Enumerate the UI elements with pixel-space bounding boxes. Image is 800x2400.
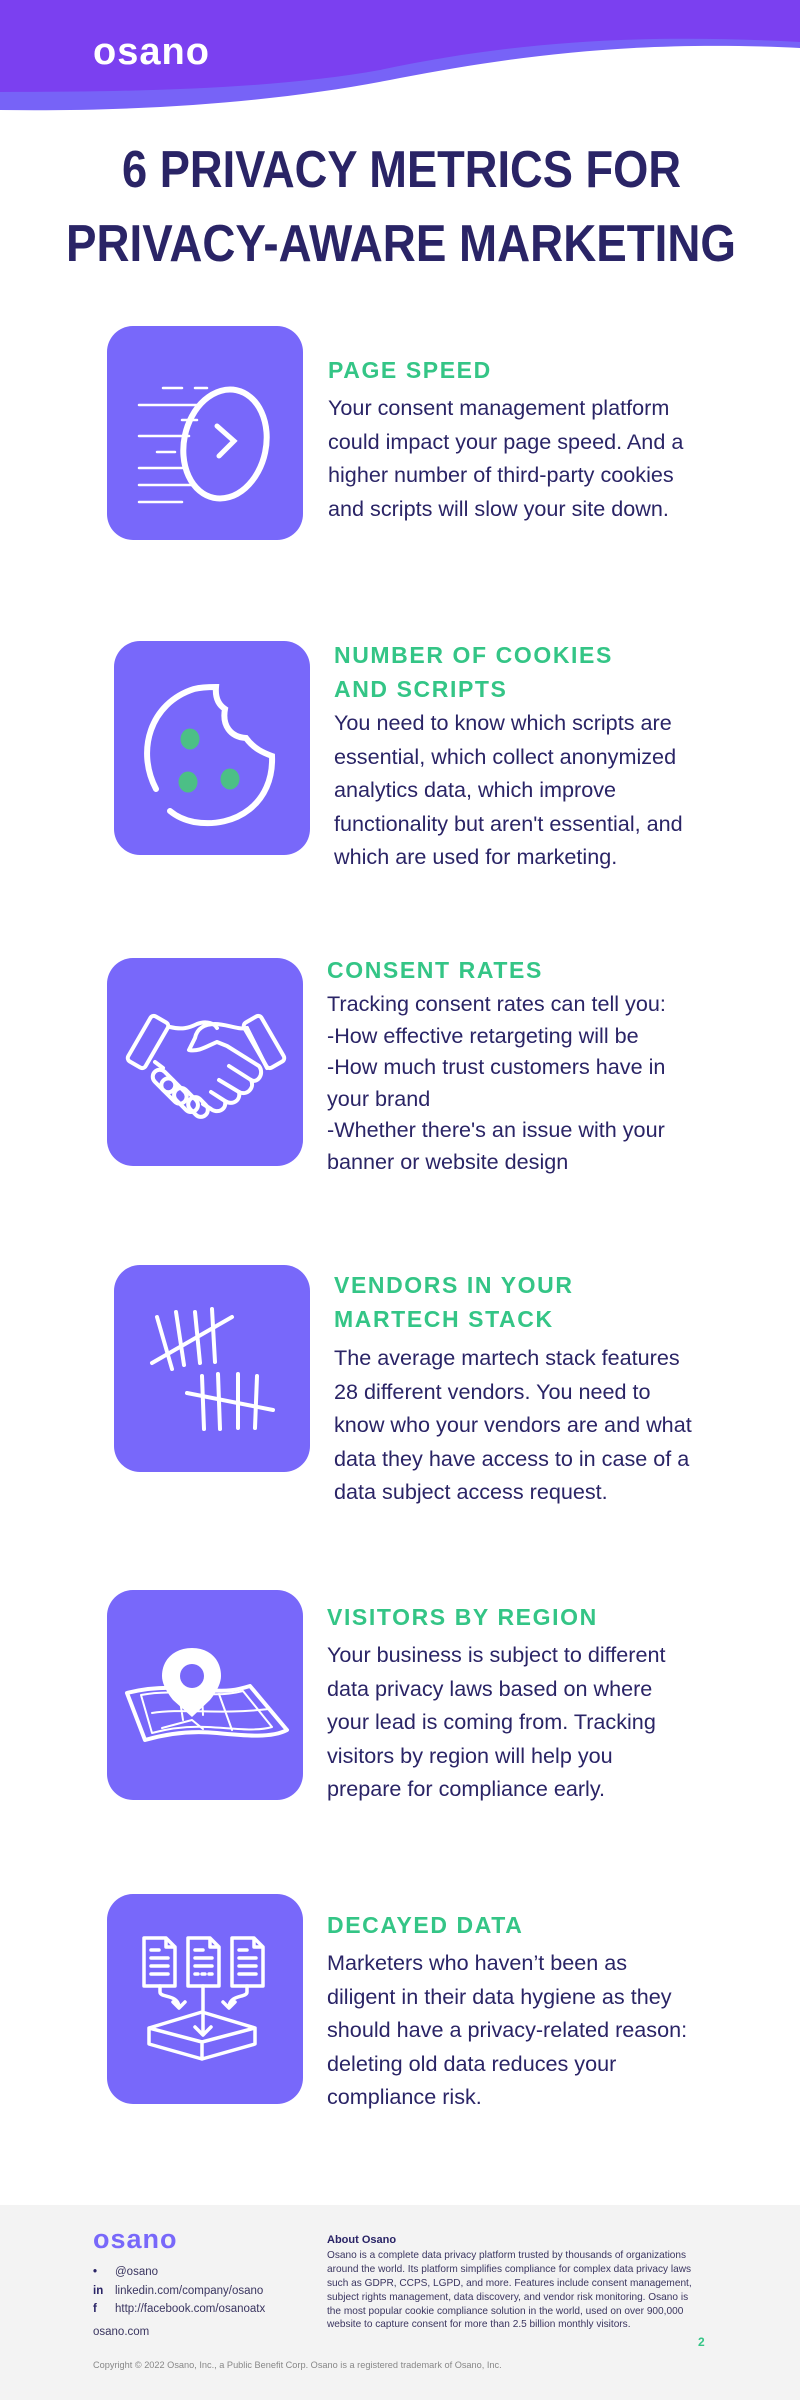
icon: map pin [107, 1590, 303, 1800]
text block: your brand [327, 1086, 430, 1110]
text block: data privacy laws based on where [327, 1676, 652, 1700]
text block: should have a privacy-related reason: [327, 2017, 687, 2042]
text block: functionality but aren't essential, and [334, 810, 683, 836]
text block: The average martech stack features [334, 1345, 680, 1370]
heading: AND SCRIPTS [334, 676, 508, 702]
text block: banner or website design [327, 1148, 568, 1174]
social links [93, 2266, 265, 2338]
text block: Tracking consent rates can tell you: [327, 991, 666, 1016]
copyright: Copyright © 2022 Osano, Inc., a Public Benefit Corp. Osano is a registered trademark of Osano, Inc. [93, 2360, 502, 2370]
text block: analytics data, which improve [334, 777, 616, 802]
title: 6 PRIVACY METRICS FOR [122, 141, 681, 199]
text block: deleting old data reduces your [327, 2050, 616, 2076]
text block: Your consent management platform [328, 395, 669, 420]
text block [328, 395, 684, 520]
icon: handshake [107, 958, 303, 1166]
icon: tally marks [114, 1265, 310, 1472]
text block: know who your vendors are and what [334, 1412, 692, 1437]
logo: osano footer: osano [93, 2224, 178, 2254]
text block: higher number of third-party cookies [328, 462, 674, 487]
heading [334, 1272, 574, 1332]
panel: consent rates [107, 957, 666, 1174]
text block: prepare for compliance early. [327, 1776, 605, 1801]
about osano [327, 2234, 692, 2330]
text block: You need to know which scripts are [334, 710, 672, 735]
heading: PAGE SPEED [328, 357, 492, 383]
text block: essential, which collect anonymized [334, 744, 676, 768]
social links: @osano [115, 2266, 158, 2278]
about osano: such as GDPR, CCPS, LGPD, and more. Features include consent management, [327, 2278, 692, 2289]
about osano: subject rights management, data discovery, and vendor risk monitoring. Osano is [327, 2292, 688, 2303]
heading: VENDORS IN YOUR [334, 1272, 574, 1298]
heading: MARTECH STACK [334, 1306, 554, 1332]
text block: Marketers who haven’t been as [327, 1950, 627, 1975]
title [66, 141, 736, 270]
text block [334, 710, 683, 869]
icon: documents to box [107, 1894, 303, 2104]
text block: -How much trust customers have in [327, 1054, 665, 1079]
text block: your lead is coming from. Tracking [327, 1709, 656, 1734]
text block: -Whether there's an issue with your [327, 1117, 665, 1142]
text block: data they have access to in case of a [334, 1446, 689, 1470]
social links: f [93, 2303, 97, 2315]
text block: data subject access request. [334, 1479, 608, 1504]
text block [334, 1345, 692, 1504]
social links: • [93, 2266, 97, 2278]
about osano: About Osano [327, 2234, 396, 2246]
about osano: around the world. Its platform simplifies compliance for complex data privacy laws [327, 2264, 691, 2275]
text block [327, 1642, 666, 1801]
heading: DECAYED DATA [327, 1912, 523, 1938]
social links: linkedin.com/company/osano [115, 2284, 263, 2296]
heading: CONSENT RATES [327, 957, 543, 983]
text block [327, 991, 666, 1174]
heading [334, 642, 613, 702]
footer [0, 2205, 800, 2400]
panel: decayed data [107, 1894, 687, 2109]
about osano: the most popular cookie compliance solution in the world, used on over 900,000 [327, 2306, 683, 2317]
text block: compliance risk. [327, 2084, 482, 2109]
heading: VISITORS BY REGION [327, 1604, 598, 1630]
panel: page speed [107, 326, 684, 540]
about osano: website to capture consent for more than 2.5 billion monthly visitors. [327, 2319, 631, 2330]
page number: 2 [698, 2335, 705, 2349]
about osano: Osano is a complete data privacy platform trusted by thousands of organizations [327, 2250, 686, 2261]
text block: could impact your page speed. And a [328, 428, 683, 454]
heading: NUMBER OF COOKIES [334, 642, 613, 668]
header wave [0, 0, 800, 110]
panel: visitors by region [107, 1590, 666, 1801]
text block: visitors by region will help you [327, 1742, 613, 1768]
text block: which are used for marketing. [334, 844, 617, 869]
logo: osano header: osano [93, 31, 210, 73]
text block: -How effective retargeting will be [327, 1022, 639, 1048]
social links: osano.com [93, 2326, 149, 2338]
icon: speed clock [107, 326, 303, 540]
text block: and scripts will slow your site down. [328, 496, 669, 520]
text block: Your business is subject to different [327, 1642, 666, 1667]
panel: vendors in martech stack [114, 1265, 692, 1504]
icon: cookie [114, 641, 310, 855]
text block: diligent in their data hygiene as they [327, 1984, 672, 2008]
social links: in [93, 2284, 103, 2296]
social links: http://facebook.com/osanoatx [115, 2303, 265, 2315]
text block: 28 different vendors. You need to [334, 1378, 651, 1404]
text block [327, 1950, 687, 2109]
panel: cookies and scripts [114, 641, 683, 869]
